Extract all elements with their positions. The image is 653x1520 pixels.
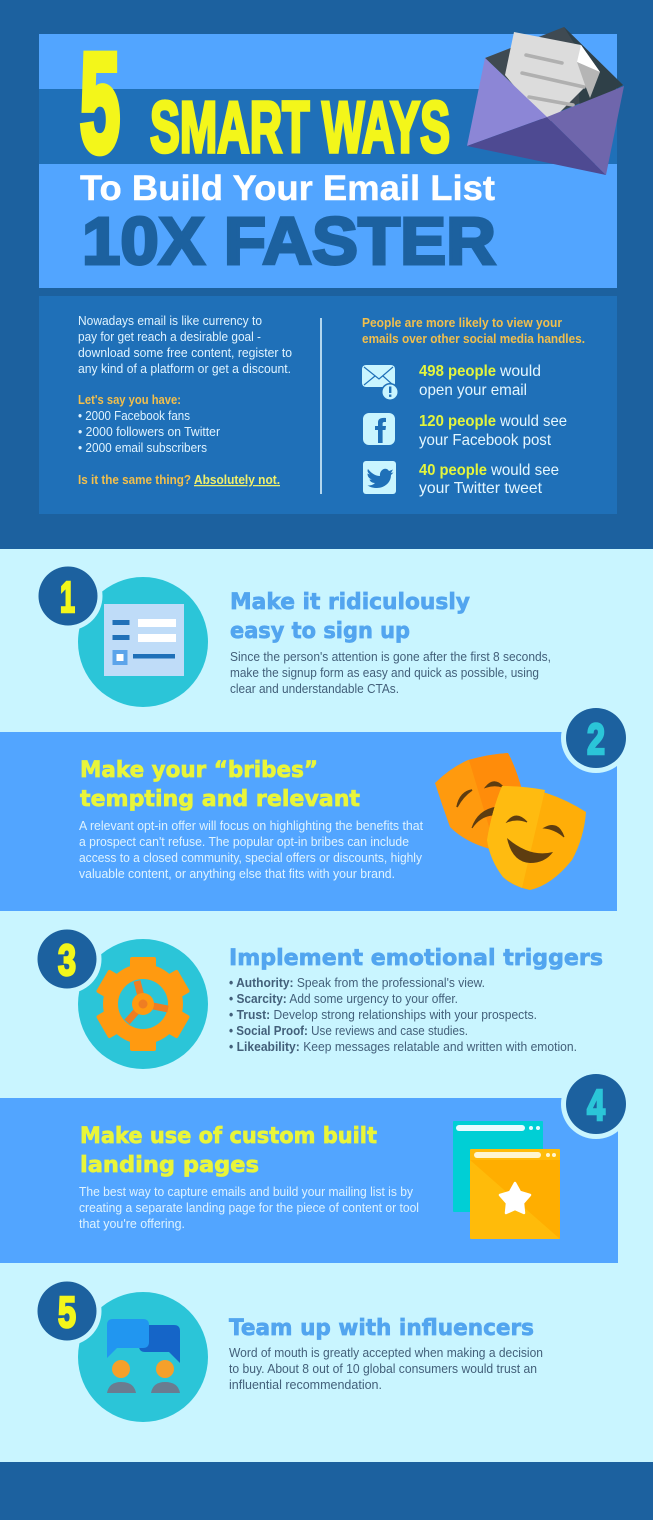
text: step 3 bullets: • Likeability: Keep messages relatable and written with emotion. — [229, 1040, 577, 1054]
text: step 2 body — [79, 819, 424, 881]
stat: email: open your email — [419, 382, 527, 399]
title: smart ways: SMART WAYS — [150, 88, 450, 168]
icon: influencers talking — [78, 1292, 208, 1422]
stat: email — [419, 363, 541, 399]
stat: facebook: your Facebook post — [419, 432, 552, 449]
text: step 3 bullets — [229, 976, 577, 1054]
text: step 4 body — [79, 1185, 419, 1231]
panel: introduction — [39, 296, 617, 514]
text: step 1 body: make the signup form as easy and quick as possible, using — [230, 666, 539, 680]
text: intro paragraph: download some free content, register to — [78, 346, 292, 360]
stat: twitter: would see — [490, 462, 559, 479]
text: intro paragraph — [78, 314, 292, 376]
text: intro paragraph: pay for get reach a desirable goal - — [78, 330, 261, 344]
icon: theatre masks — [435, 753, 586, 890]
heading: step 2: tempting and relevant — [80, 787, 360, 812]
text: step 5 body — [229, 1346, 543, 1392]
panel: step 5 — [32, 1276, 543, 1422]
text: step 1 body — [230, 650, 551, 696]
stat: facebook: would see — [499, 413, 567, 430]
heading: step 1: easy to sign up — [230, 619, 410, 644]
text: step 1 body: clear and understandable CTAs. — [230, 682, 399, 696]
text: audience list — [78, 393, 220, 455]
heading: step 3: Implement emotional triggers — [229, 946, 603, 971]
text: step 4 body: creating a separate landing page for the piece of content or tool — [79, 1201, 419, 1215]
stat: facebook: 120 people — [419, 413, 496, 430]
icon: facebook — [363, 413, 395, 445]
stat: twitter: 40 people — [419, 462, 487, 479]
title: to build your email list: To Build Your Email List — [80, 169, 495, 208]
text: step 2 body: valuable content, or anything else that fits with your brand. — [79, 867, 395, 881]
text: audience list: • 2000 email subscribers — [78, 441, 207, 455]
text: step 5 body: Word of mouth is greatly accepted when making a decision — [229, 1346, 543, 1360]
stat: email: would — [499, 363, 541, 380]
heading: step 1: Make it ridiculously — [230, 590, 470, 615]
stat: email: 498 people — [419, 363, 496, 380]
badge: number 2: 2 — [587, 715, 605, 764]
stat: facebook — [419, 413, 567, 449]
badge: number 3: 3 — [58, 936, 76, 985]
panel: step 3 — [32, 924, 603, 1069]
text: audience list: • 2000 followers on Twitter — [78, 425, 220, 439]
text: step 4 body: The best way to capture emails and build your mailing list is by — [79, 1185, 414, 1199]
stat: twitter — [419, 462, 559, 497]
stat: twitter: your Twitter tweet — [419, 480, 543, 497]
text: question: Is it the same thing? — [78, 473, 191, 487]
text: step 5 body: to buy. About 8 out of 10 global consumers would trust an — [229, 1362, 537, 1376]
badge: number 5: 5 — [58, 1288, 76, 1337]
text: step 4 body: that you're offering. — [79, 1217, 185, 1231]
text: step 3 bullets: • Scarcity: Add some urgency to your offer. — [229, 992, 458, 1006]
text: step 1 body: Since the person's attention is gone after the first 8 seconds, — [230, 650, 551, 664]
icon: email alert — [362, 365, 399, 401]
panel: step 1 — [34, 562, 551, 707]
icon: open envelope — [467, 27, 624, 175]
text: comparison heading — [362, 316, 585, 346]
text: question: Absolutely not. — [194, 473, 280, 487]
text: intro paragraph: Nowadays email is like currency to — [78, 314, 262, 328]
title: number 5: 5 — [80, 24, 120, 181]
badge: number 5 — [32, 1276, 102, 1346]
heading: step 4: landing pages — [80, 1153, 259, 1178]
icon: twitter — [363, 461, 396, 494]
panel: step 4 — [0, 1069, 631, 1263]
badge: number 1 — [34, 562, 102, 630]
panel: step 2 — [0, 703, 631, 911]
panel: title banner — [39, 24, 624, 288]
heading: step 4 — [80, 1124, 377, 1178]
text: step 3 bullets: • Social Proof: Use reviews and case studies. — [229, 1024, 468, 1038]
heading: step 5: Team up with influencers — [229, 1316, 534, 1341]
text: step 2 body: access to a closed community, special offers or discounts, highly — [79, 851, 423, 865]
icon: signup form — [78, 577, 208, 707]
text: question — [78, 473, 280, 487]
badge: number 3 — [32, 924, 102, 994]
text: step 2 body: a prospect can't refuse. The popular opt-in bribes can include — [79, 835, 409, 849]
heading: step 4: Make use of custom built — [80, 1124, 377, 1149]
title: 10x faster: 10X FASTER — [82, 204, 496, 279]
badge: number 4 — [561, 1069, 631, 1139]
heading: step 2: Make your “bribes” — [80, 758, 318, 783]
text: intro paragraph: any kind of a platform or get a discount. — [78, 362, 291, 376]
text: step 2 body: A relevant opt-in offer will focus on highlighting the benefits that — [79, 819, 424, 833]
text: audience list: Let's say you have: — [78, 393, 181, 407]
text: audience list: • 2000 Facebook fans — [78, 409, 190, 423]
text: comparison heading: emails over other social media handles. — [362, 332, 585, 346]
badge: number 4: 4 — [587, 1081, 605, 1130]
text: step 5 body: influential recommendation. — [229, 1378, 382, 1392]
icon: gear — [78, 939, 208, 1069]
text: comparison heading: People are more likely to view your — [362, 316, 562, 330]
heading: step 2 — [80, 758, 360, 812]
icon: landing page windows — [453, 1121, 560, 1239]
badge: number 2 — [561, 703, 631, 773]
badge: number 1: 1 — [60, 573, 75, 622]
text: step 3 bullets: • Authority: Speak from the professional's view. — [229, 976, 485, 990]
text: step 3 bullets: • Trust: Develop strong relationships with your prospects. — [229, 1008, 537, 1022]
heading: step 1 — [230, 590, 470, 644]
